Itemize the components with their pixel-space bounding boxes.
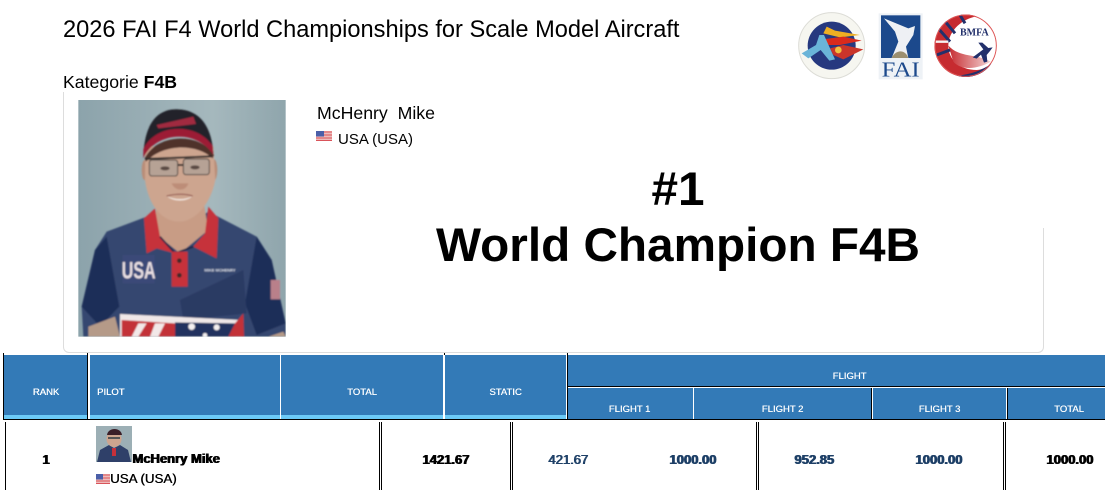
panel: pilot card — [63, 92, 1044, 353]
icon: BMFA logo — [934, 14, 997, 77]
cell: pilot country: USA (USA) — [110, 471, 176, 486]
photo: pilot portrait — [78, 100, 286, 337]
icon: USA flag — [316, 131, 332, 141]
pilot country: USA (USA) — [338, 131, 413, 148]
icon: championship logo — [799, 13, 865, 79]
header: flight group: FLIGHT — [833, 371, 866, 382]
icon: BMFA logo: BMFA — [960, 28, 989, 39]
header: flight total: TOTAL — [1054, 404, 1084, 415]
cell: rank: 1 — [42, 452, 49, 467]
panel: pilot card white cover — [517, 92, 1047, 228]
headline: rank: #1 — [651, 163, 705, 216]
cell: total score: 1421.67 — [422, 452, 469, 467]
results table — [3, 353, 1105, 490]
category label: Kategorie F4B — [63, 72, 177, 92]
icon: FAI logo — [879, 13, 923, 82]
header: total: TOTAL — [347, 387, 377, 398]
cell: flight 3 score: 1000.00 — [915, 452, 962, 467]
header: flight 1: FLIGHT 1 — [609, 404, 650, 415]
photo: pilot portrait: USA — [122, 259, 156, 285]
photo: pilot portrait: MIKE MCHENRY — [204, 267, 236, 272]
cell: static score: 421.67 — [548, 452, 588, 467]
pilot name: McHenry Mike — [317, 103, 435, 123]
cell: pilot name: McHenry Mike — [132, 451, 219, 466]
icon: table USA flag — [96, 474, 110, 484]
cell: flight 2 score: 952.85 — [794, 452, 834, 467]
cell: flight total score: 1000.00 — [1046, 452, 1093, 467]
header: pilot: PILOT — [97, 387, 124, 398]
header: flight 2: FLIGHT 2 — [762, 404, 803, 415]
icon: FAI logo: FAI — [882, 58, 920, 82]
title: 2026 FAI F4 World Championships for Scale Model Aircraft — [63, 16, 679, 43]
cell: flight 1 score: 1000.00 — [669, 452, 716, 467]
row separators — [5, 422, 1006, 490]
header background — [4, 355, 1105, 419]
header: flight 3: FLIGHT 3 — [919, 404, 960, 415]
header: rank: RANK — [33, 387, 59, 398]
cell: pilot thumbnail — [96, 426, 132, 462]
headline: world champion: World Champion F4B — [436, 219, 920, 272]
header: static: STATIC — [489, 387, 522, 398]
logos — [798, 12, 997, 82]
